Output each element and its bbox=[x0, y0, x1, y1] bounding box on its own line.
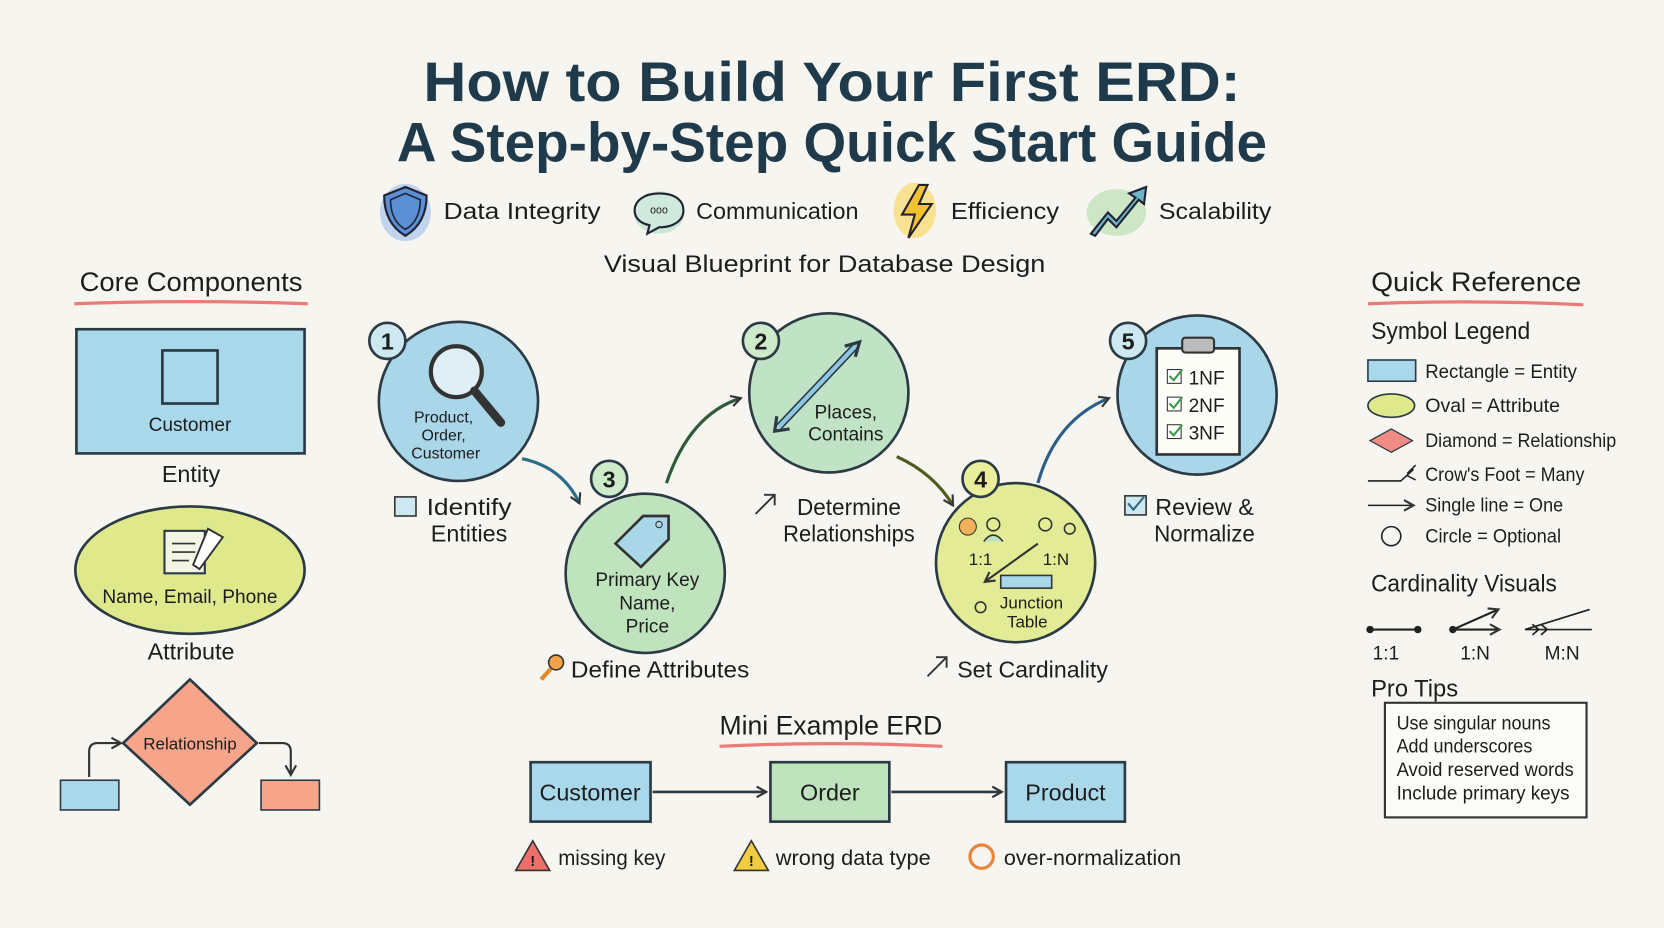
step 2 label bbox=[756, 494, 915, 546]
benefits row bbox=[380, 183, 1272, 241]
symbol legend: Diamond = Relationship bbox=[1425, 431, 1616, 452]
warnings: missing key bbox=[558, 847, 666, 870]
step 1 circle: 1 bbox=[381, 328, 394, 354]
step 1 label: Identify bbox=[427, 494, 512, 520]
entity: customer: Customer bbox=[539, 779, 641, 805]
symbol legend: Rectangle = Entity bbox=[1425, 362, 1577, 383]
step 1 circle: Order, bbox=[421, 428, 466, 445]
panel: quick reference: Pro Tips bbox=[1371, 675, 1458, 702]
panel: core components bbox=[60, 267, 319, 810]
step 3 circle bbox=[566, 461, 725, 653]
symbol legend: Oval = Attribute bbox=[1425, 396, 1560, 417]
cardinality icons bbox=[1366, 609, 1592, 664]
mini example ERD bbox=[516, 711, 1181, 870]
benefits row: Data Integrity bbox=[444, 198, 601, 224]
step 1 circle bbox=[369, 322, 538, 481]
warnings: wrong data type bbox=[775, 847, 931, 870]
pro tips box: Use singular nouns bbox=[1397, 713, 1550, 734]
step 4 label: Set Cardinality bbox=[957, 656, 1108, 682]
entity: product bbox=[1006, 762, 1125, 822]
title bbox=[397, 51, 1267, 174]
step 5 label: Review & bbox=[1155, 494, 1254, 520]
title: How to Build Your First ERD: bbox=[423, 51, 1241, 113]
entity box bbox=[76, 329, 305, 453]
cardinality icons: M:N bbox=[1545, 643, 1580, 664]
panel: quick reference: Symbol Legend bbox=[1371, 318, 1530, 345]
step 4 circle: Table bbox=[1007, 612, 1048, 631]
step 3 circle: Name, bbox=[619, 593, 675, 614]
pro tips box: Avoid reserved words bbox=[1397, 760, 1574, 781]
icon: shield bbox=[380, 184, 431, 241]
symbol legend bbox=[1368, 360, 1616, 548]
pro tips box: Add underscores bbox=[1397, 737, 1532, 758]
step 5 label bbox=[1125, 494, 1255, 546]
step 1 circle: Customer bbox=[411, 446, 481, 463]
icon: speech bubble bbox=[634, 191, 684, 234]
step 4 circle: 1:N bbox=[1043, 550, 1069, 569]
warnings: ! bbox=[749, 854, 754, 870]
arrow 4 to 5 bbox=[1038, 398, 1109, 483]
pro tips box: Include primary keys bbox=[1397, 783, 1570, 804]
arrow 2 to 4 bbox=[897, 457, 953, 505]
relationship diamond: Relationship bbox=[143, 734, 237, 753]
warnings: ! bbox=[530, 854, 535, 870]
step 2 circle: Places, bbox=[814, 402, 877, 423]
step 4 circle: 4 bbox=[974, 466, 987, 492]
entity: order bbox=[770, 762, 889, 822]
arrow 3 to 2 bbox=[666, 398, 741, 483]
panel: quick reference bbox=[1366, 267, 1616, 817]
step 3 label: Define Attributes bbox=[571, 656, 749, 682]
benefits row: Scalability bbox=[1159, 198, 1272, 224]
symbol legend: Circle = Optional bbox=[1425, 527, 1561, 548]
benefits row: Efficiency bbox=[951, 198, 1059, 224]
warnings: over-normalization bbox=[1004, 847, 1181, 870]
heading: mini example: Mini Example ERD bbox=[720, 711, 942, 741]
panel: core components: Entity bbox=[162, 461, 221, 487]
entity: order: Order bbox=[800, 779, 860, 805]
step 2 label: Determine bbox=[797, 494, 901, 520]
icon: growth arrow bbox=[1087, 187, 1146, 236]
relationship diamond bbox=[60, 679, 319, 810]
step 1 label bbox=[395, 494, 512, 546]
step 4 circle: Junction bbox=[1000, 593, 1063, 612]
heading: quick reference: Quick Reference bbox=[1371, 267, 1581, 297]
subtitle: Visual Blueprint for Database Design bbox=[604, 251, 1045, 278]
arrow bbox=[653, 791, 766, 793]
panel: quick reference: Cardinality Visuals bbox=[1371, 570, 1557, 597]
symbol legend: Crow's Foot = Many bbox=[1425, 465, 1585, 486]
arrow 1 to 3 bbox=[522, 459, 579, 503]
attribute oval: Name, Email, Phone bbox=[102, 587, 278, 608]
step 2 circle: 2 bbox=[754, 328, 767, 354]
symbol legend: Single line = One bbox=[1425, 496, 1563, 517]
step 5 label: Normalize bbox=[1154, 520, 1255, 546]
step 2 circle: Contains bbox=[808, 425, 883, 446]
panel: core components: Attribute bbox=[148, 638, 234, 664]
cardinality icons: 1:1 bbox=[1373, 643, 1399, 664]
step 4 circle: 1:1 bbox=[969, 550, 992, 569]
warnings bbox=[516, 841, 1181, 870]
icon: lightning bbox=[894, 183, 936, 238]
step 5 circle: 1NF bbox=[1189, 368, 1225, 389]
entity: product: Product bbox=[1025, 779, 1106, 805]
icon: speech bubble: ooo bbox=[650, 205, 668, 217]
step 5 circle: 3NF bbox=[1189, 424, 1225, 445]
step 5 circle: 5 bbox=[1122, 328, 1135, 354]
step 4 circle bbox=[936, 461, 1095, 642]
step 1 circle: Product, bbox=[414, 410, 473, 427]
step 3 circle: Primary Key bbox=[595, 570, 700, 591]
attribute oval bbox=[75, 506, 305, 634]
step 3 circle: Price bbox=[626, 617, 669, 638]
heading: core components: Core Components bbox=[80, 267, 302, 297]
entity box: Customer bbox=[149, 415, 232, 436]
arrow bbox=[891, 791, 1002, 793]
step 5 circle bbox=[1110, 315, 1277, 475]
entity: customer bbox=[531, 762, 651, 822]
step 2 circle bbox=[743, 313, 908, 472]
step 1 label: Entities bbox=[431, 520, 507, 546]
pro tips box bbox=[1385, 703, 1587, 817]
benefits row: Communication bbox=[696, 198, 859, 224]
step 2 label: Relationships bbox=[783, 520, 915, 546]
title: A Step-by-Step Quick Start Guide bbox=[397, 112, 1267, 174]
step 5 circle: 2NF bbox=[1189, 396, 1225, 417]
cardinality icons: 1:N bbox=[1460, 643, 1490, 664]
step 3 circle: 3 bbox=[603, 466, 616, 492]
